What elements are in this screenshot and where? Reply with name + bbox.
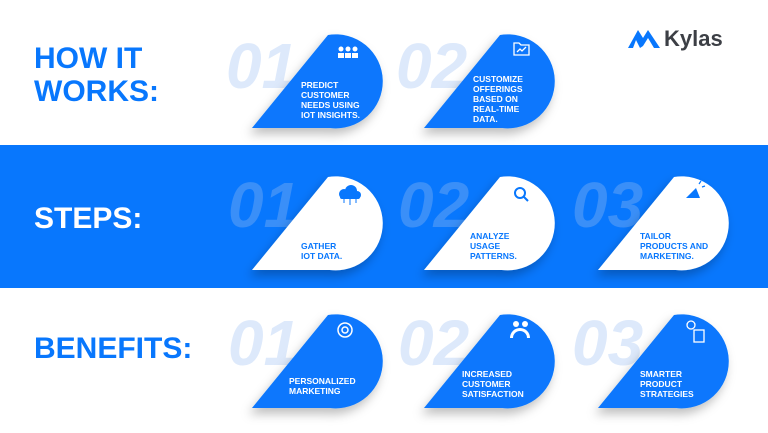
- card: gather iot data: [252, 176, 383, 270]
- card: smarter product strategies: PRODUCT: [640, 379, 683, 389]
- card: personalized marketing: PERSONALIZED: [289, 376, 356, 386]
- card: tailor products: PRODUCTS AND: [640, 241, 708, 251]
- row 3 numbers: 01: [228, 307, 299, 379]
- card: gather iot data: IOT DATA.: [301, 251, 342, 261]
- row 3 numbers: [228, 307, 643, 379]
- card: customize offerings: BASED ON: [473, 94, 518, 104]
- icon: magnifier: [515, 188, 528, 201]
- card: analyze usage patterns: PATTERNS.: [470, 251, 517, 261]
- card: customize offerings: REAL-TIME: [473, 104, 520, 114]
- card: increased satisfaction: CUSTOMER: [462, 379, 510, 389]
- row 3 numbers: 03: [572, 307, 643, 379]
- title: steps: STEPS:: [34, 202, 142, 235]
- row 1 numbers: 01: [226, 30, 297, 102]
- logo: Kylas: Kylas: [664, 26, 723, 51]
- card: smarter product strategies: SMARTER: [640, 369, 682, 379]
- card: analyze usage patterns: USAGE: [470, 241, 501, 251]
- row 2 numbers: 03: [572, 169, 643, 241]
- card: predict customer needs: [252, 34, 383, 128]
- card: gather iot data: GATHER: [301, 241, 336, 251]
- card: increased satisfaction: [424, 314, 555, 408]
- card: analyze usage patterns: [424, 176, 555, 270]
- card: personalized marketing: [252, 314, 383, 408]
- card: customize offerings: OFFERINGS: [473, 84, 523, 94]
- icon: people gauge: [510, 321, 530, 338]
- row 2 numbers: 02: [398, 169, 469, 241]
- card: tailor products: TAILOR: [640, 231, 671, 241]
- card: smarter product strategies: STRATEGIES: [640, 389, 694, 399]
- icon: folder chart: [514, 43, 529, 55]
- blue band: [0, 145, 768, 288]
- logo: Kylas: [628, 26, 723, 51]
- card: customize offerings: DATA.: [473, 114, 498, 124]
- card: predict customer needs: PREDICT: [301, 80, 338, 90]
- row 3 numbers: 02: [398, 307, 469, 379]
- card: customize offerings: CUSTOMIZE: [473, 74, 523, 84]
- card: increased satisfaction: INCREASED: [462, 369, 512, 379]
- icon: cloud: [339, 185, 361, 205]
- card: predict customer needs: CUSTOMER: [301, 90, 350, 100]
- icon: people: [338, 46, 358, 58]
- card: predict customer needs: NEEDS USING: [301, 100, 360, 110]
- row 1 numbers: 02: [396, 30, 467, 102]
- row 1 numbers: [226, 30, 467, 102]
- title: benefits: BENEFITS:: [34, 332, 192, 365]
- row 2 numbers: [228, 169, 643, 241]
- card: personalized marketing: MARKETING: [289, 386, 341, 396]
- icon: bulb board: [687, 321, 704, 342]
- icon: target: [338, 323, 352, 337]
- card: tailor products: [598, 176, 729, 270]
- title: how it works: HOW IT: [34, 42, 142, 75]
- title: how it works: WORKS:: [34, 75, 159, 108]
- card: predict customer needs: IOT INSIGHTS.: [301, 110, 360, 120]
- row 2 numbers: 01: [228, 169, 299, 241]
- card: smarter product strategies: [598, 314, 729, 408]
- card: customize offerings: [424, 34, 555, 128]
- card: increased satisfaction: SATISFACTION: [462, 389, 524, 399]
- card: analyze usage patterns: ANALYZE: [470, 231, 509, 241]
- icon: megaphone: [686, 181, 705, 198]
- card: tailor products: MARKETING.: [640, 251, 694, 261]
